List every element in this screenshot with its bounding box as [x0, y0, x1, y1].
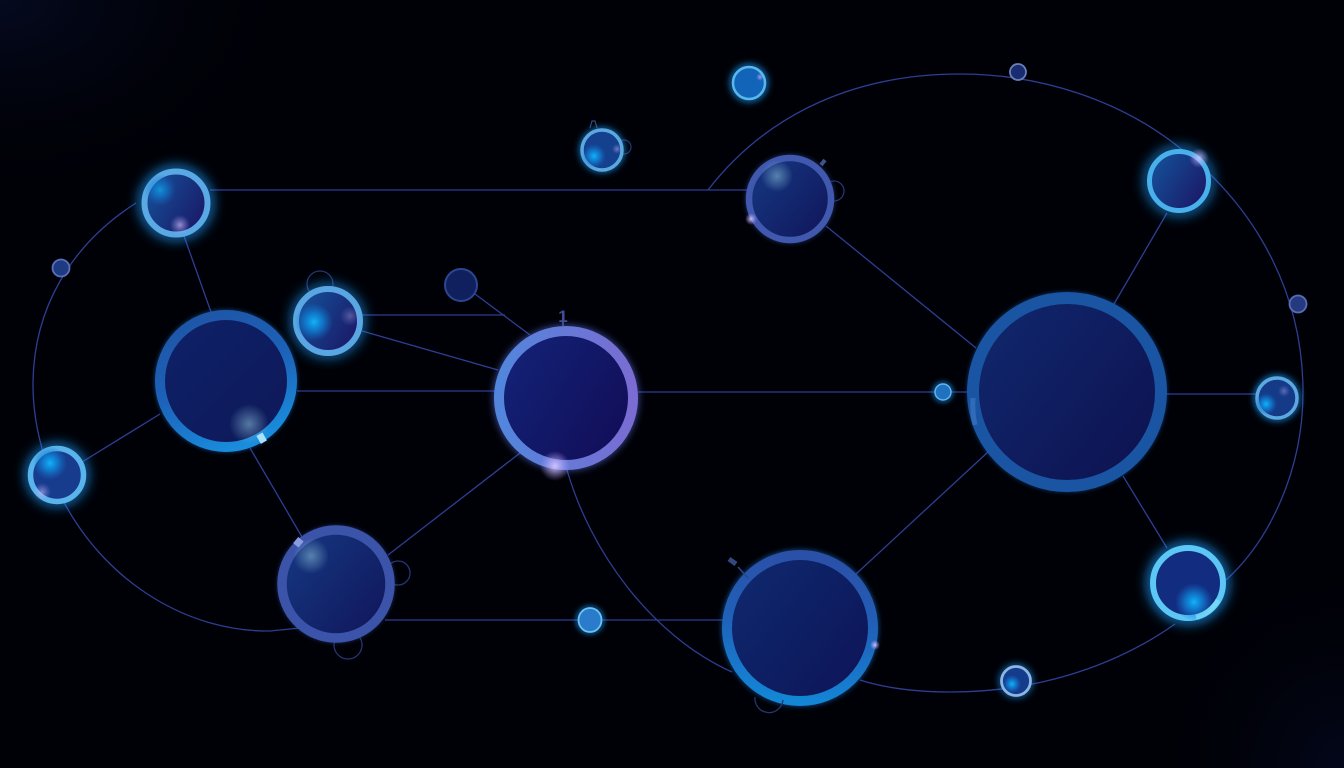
- node: lower left: [281, 529, 410, 659]
- node: small dots: [52, 64, 1306, 633]
- numeral above centre node: 1: [558, 307, 568, 326]
- node: large bottom: [725, 553, 880, 713]
- node: glowing top right: [1148, 148, 1210, 212]
- node: glowing bottom right: [1152, 547, 1224, 621]
- node: large left: [159, 314, 293, 448]
- node: small orb upper: [732, 66, 766, 100]
- node: small orb bottom: [1001, 666, 1031, 696]
- node: small orb right: [1255, 378, 1298, 418]
- node: glowing left middle: [295, 271, 361, 354]
- node: large centre: [497, 307, 635, 481]
- node: small orb top: [582, 121, 631, 170]
- node: glowing far left: [30, 446, 84, 502]
- node: glowing top left: [143, 170, 209, 236]
- node: upper middle: [745, 157, 844, 241]
- node: large right: [971, 296, 1163, 488]
- connector lines: [33, 74, 1303, 692]
